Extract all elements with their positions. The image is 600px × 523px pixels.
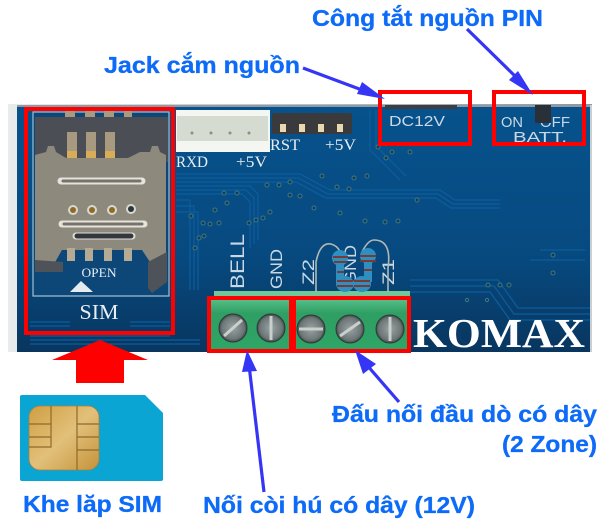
contacts bottom [67,248,132,261]
terminal block [210,291,410,351]
panel: circuit board [8,104,592,352]
silkscreen labels: Z2 [299,259,318,285]
silkscreen outline [33,112,169,296]
open triangle [70,281,93,292]
power jack and battery switch [385,105,551,123]
SIM holder [33,111,169,324]
silkscreen labels: RST [270,137,300,154]
silkscreen labels: GND [341,245,360,285]
OPEN label: OPEN [82,265,117,280]
white connector [176,110,270,152]
icon: SIM card [20,395,163,481]
black pin header [272,113,352,134]
highlight box: power jack [380,92,470,144]
silkscreen labels: +5V [325,137,356,154]
arrow: red up arrow to SIM slot [52,340,148,383]
arrow: to battery switch [467,29,533,95]
highlight box: battery switch [494,92,584,144]
silkscreen labels: OFF [540,114,570,131]
contacts top [65,111,132,123]
logo: KOMAX: KOMAX [413,310,585,356]
resistors [316,240,389,292]
arrow: to sensor terminals [355,350,399,402]
icon: gold chip [29,406,99,470]
highlight box: SIM slot [26,109,173,333]
silkscreen labels: Z1 [379,259,398,285]
label: sensor terminals [332,401,597,457]
SIM label: SIM [80,300,119,324]
label: SIM slot: Khe lăp SIM [23,491,162,517]
silkscreen labels: RXD [176,154,208,171]
label: siren terminals: Nối còi hú có dây (12V) [203,492,475,518]
arrow: to power jack [303,68,385,99]
label: sensor terminals: (2 Zone) [502,431,597,457]
silkscreen labels [176,113,570,289]
silkscreen labels: ON [501,114,523,131]
arrow: to siren terminals [242,350,264,492]
highlight box: bell terminals [209,298,291,351]
silkscreen labels: BELL [228,234,249,289]
silkscreen labels: DC12V [389,113,445,130]
silkscreen labels: +5V [236,154,267,171]
circuit traces [30,110,590,344]
label: sensor terminals: Đấu nối đầu dò có dây [332,401,597,427]
metal cover [35,146,166,264]
silkscreen labels: GND [267,249,286,289]
screws [219,314,404,343]
highlight box: zone terminals [294,298,409,351]
silkscreen labels: BATT. [513,129,567,146]
vias [189,145,555,302]
label: battery switch: Công tắt nguồn PIN [312,4,543,31]
label: power jack: Jack cắm nguồn [104,51,300,78]
